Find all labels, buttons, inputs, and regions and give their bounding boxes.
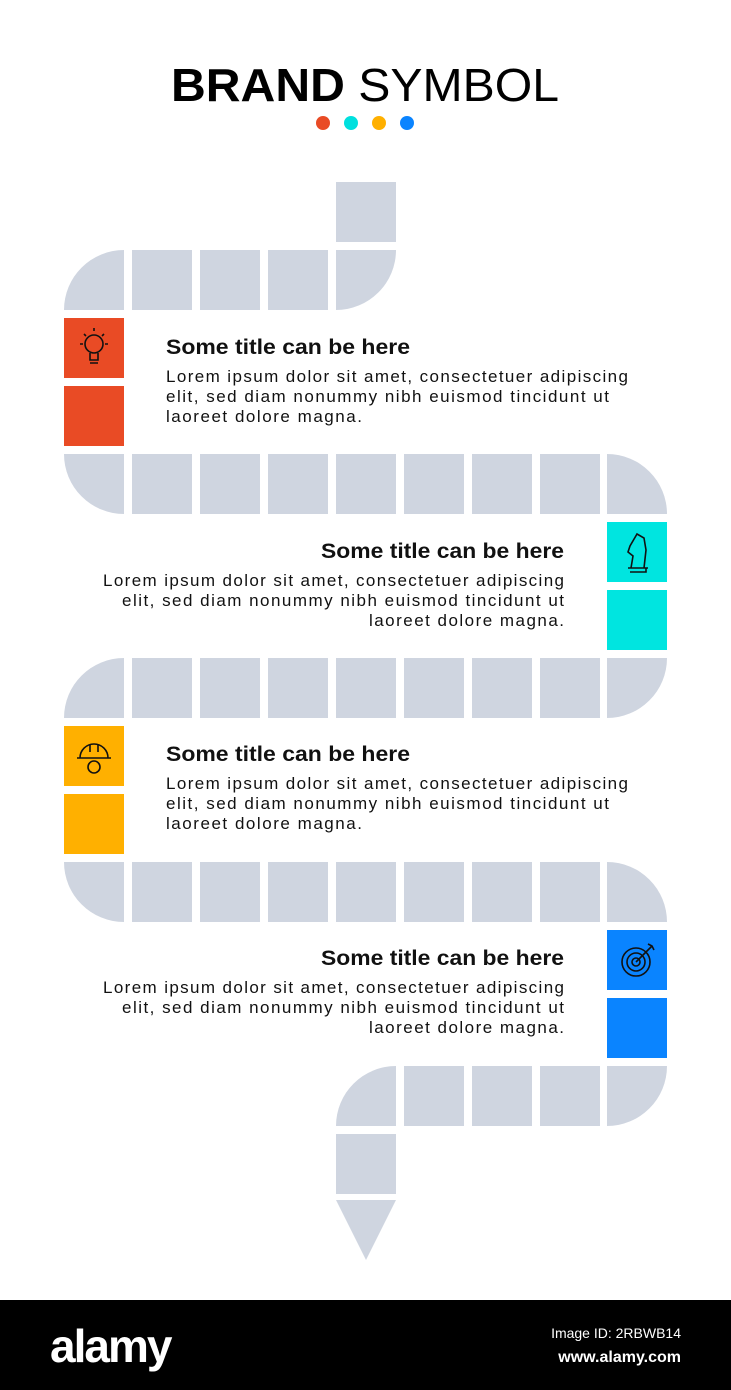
- footer: www.alamy.com: [557, 1349, 681, 1366]
- text 4: Lorem ipsum dolor sit amet, consectetuer adipiscing: [103, 978, 564, 997]
- text 1: elit, sed diam nonummy nibh euismod tincidunt ut: [166, 387, 609, 406]
- text 2: [103, 540, 564, 630]
- text 4: laoreet dolore magna.: [369, 1018, 564, 1037]
- text 2: elit, sed diam nonummy nibh euismod tincidunt ut: [122, 591, 564, 610]
- icon: knight: [628, 534, 648, 572]
- icon: target: [622, 944, 654, 976]
- text 2: Lorem ipsum dolor sit amet, consectetuer adipiscing: [103, 571, 564, 590]
- footer: [0, 1300, 731, 1390]
- icon: helmet gear: [77, 744, 111, 773]
- text 3: Lorem ipsum dolor sit amet, consectetuer adipiscing: [166, 774, 628, 793]
- path tiles: [64, 182, 667, 1194]
- footer: alamy: [50, 1320, 173, 1372]
- text 4: Some title can be here: [321, 947, 564, 970]
- arrow head: [336, 1200, 396, 1260]
- text 1: Some title can be here: [166, 336, 410, 359]
- footer: Image ID: 2RBWB14: [551, 1325, 681, 1341]
- text 1: Lorem ipsum dolor sit amet, consectetuer adipiscing: [166, 367, 628, 386]
- text 3: Some title can be here: [166, 743, 410, 766]
- text 1: [166, 336, 628, 426]
- text 1: laoreet dolore magna.: [166, 407, 362, 426]
- color dots: [316, 116, 414, 130]
- text 2: laoreet dolore magna.: [369, 611, 564, 630]
- step 2 marker: [607, 522, 667, 650]
- title: BRAND SYMBOL: [171, 59, 559, 111]
- step 4 marker: [607, 930, 667, 1058]
- text 4: elit, sed diam nonummy nibh euismod tincidunt ut: [122, 998, 564, 1017]
- text 2: Some title can be here: [321, 540, 564, 563]
- text 3: elit, sed diam nonummy nibh euismod tincidunt ut: [166, 794, 609, 813]
- icon: bulb: [80, 328, 108, 363]
- step 1 marker: [64, 318, 124, 446]
- text 4: [103, 947, 564, 1037]
- step 3 marker: [64, 726, 124, 854]
- text 3: [166, 743, 628, 833]
- text 3: laoreet dolore magna.: [166, 814, 362, 833]
